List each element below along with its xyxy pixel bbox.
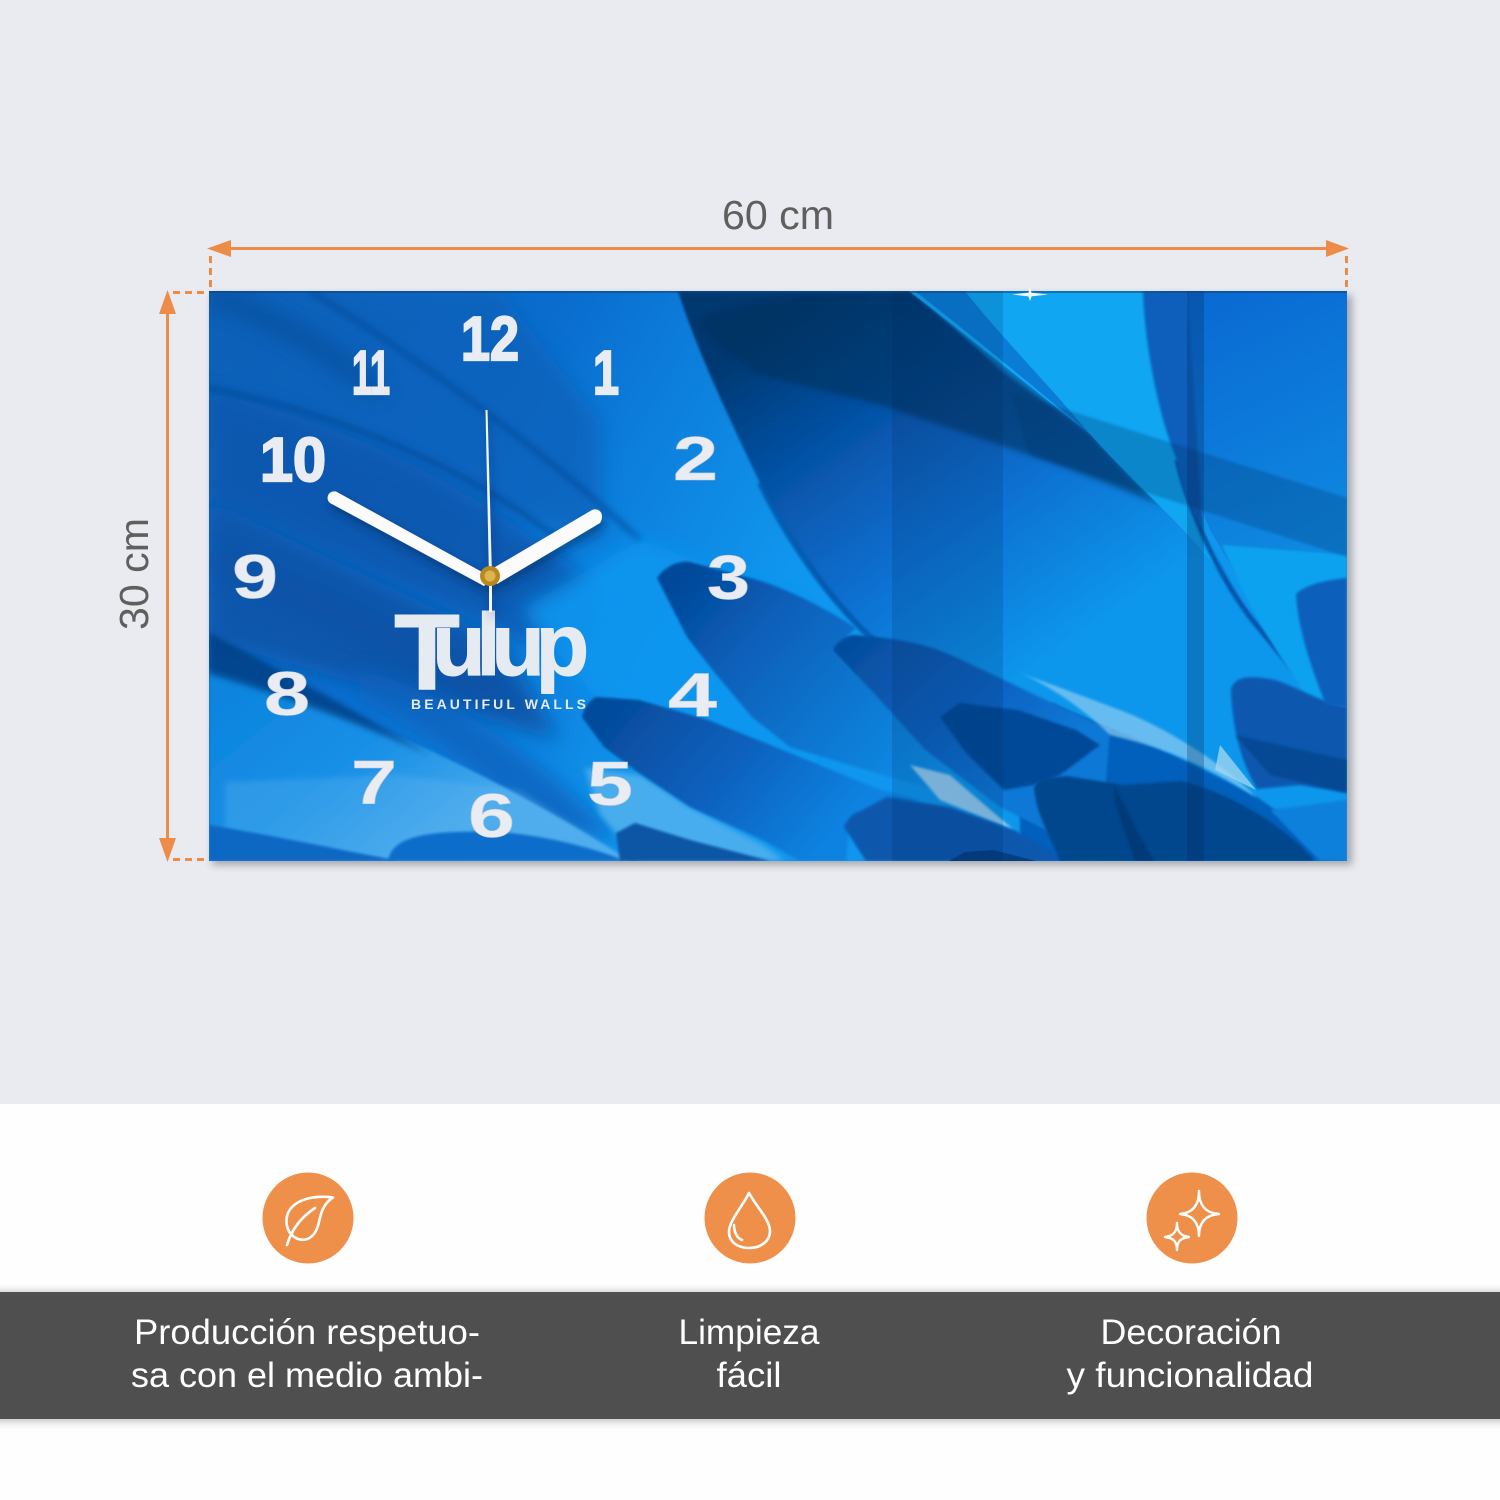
clock numerals: 12	[461, 305, 519, 374]
pale highlight above feather lobe	[910, 765, 1014, 830]
logo: Tulup Beautiful Walls: ulup	[432, 595, 586, 694]
diagonal reflected band	[1024, 404, 1347, 558]
dimension arrow: horizontal	[207, 240, 1349, 291]
clock numerals: 6	[468, 782, 515, 851]
dark petal mid bottom	[940, 703, 1100, 790]
logo: Tulup Beautiful Walls: T	[394, 591, 460, 712]
clock shadow	[212, 295, 1352, 865]
label: easy cleaning: fácil	[716, 1356, 782, 1395]
dark upper mass	[696, 291, 1162, 506]
upper right petal	[1160, 291, 1347, 566]
second lobe petal	[832, 634, 1110, 830]
vertical reflection bands	[892, 291, 1003, 861]
feature bar shadow	[0, 1291, 1500, 1422]
dimension label: height 30 cm: 30 cm	[111, 518, 157, 630]
small lobe at bottom edge	[949, 850, 1036, 861]
bright strip at lower right	[1270, 800, 1347, 861]
big dark petal	[677, 291, 1177, 662]
label: easy cleaning	[678, 1313, 820, 1395]
clock hands	[328, 410, 602, 612]
pale streak between lower petals	[585, 768, 785, 861]
diagonal darker band under logo	[369, 696, 614, 844]
clock numerals: 1	[593, 339, 619, 408]
clock numerals: 8	[264, 660, 310, 729]
clock numerals	[232, 305, 750, 851]
clock numerals: 10	[260, 426, 326, 495]
label: eco-friendly production	[131, 1313, 483, 1395]
label: decoration and functionality	[1066, 1313, 1314, 1395]
dimension arrow: vertical	[159, 290, 208, 862]
icon: leaf	[262, 1172, 354, 1264]
feature: decoration and functionality	[1066, 1172, 1314, 1395]
label: easy cleaning: Limpieza	[678, 1313, 820, 1352]
label: decoration and functionality: y funcionalidad	[1066, 1356, 1314, 1395]
clock numerals: 5	[587, 750, 633, 819]
logo: Tulup Beautiful Walls	[394, 591, 586, 712]
bottom petal lobes	[388, 832, 625, 861]
dark lower petals	[1034, 776, 1315, 861]
lobe at bottom left of centre	[616, 823, 770, 861]
bottom white panel	[0, 1104, 1500, 1500]
clock numerals: 11	[352, 339, 390, 408]
petal at right	[1020, 703, 1347, 861]
dark navy edge, lower left	[209, 632, 430, 755]
feature: eco-friendly production	[131, 1172, 483, 1395]
long petal, bottom centre	[582, 697, 920, 861]
upper left darker petal with soft streaks	[332, 295, 604, 540]
clock numerals: 9	[232, 543, 278, 612]
label: eco-friendly production: sa con el medio ambi-	[131, 1356, 483, 1395]
icon: sparkles	[1146, 1172, 1238, 1264]
clock face artwork: blue petals	[209, 291, 1347, 861]
glass top edge	[209, 291, 1347, 293]
clock numerals: 4	[668, 661, 718, 730]
clock numerals: 7	[351, 749, 397, 818]
clock numerals: 3	[707, 544, 750, 613]
clock numerals: 2	[673, 425, 718, 494]
dark feature bar	[0, 1292, 1500, 1419]
feature: easy cleaning	[678, 1172, 820, 1395]
top right bright panel	[909, 291, 1225, 580]
icon: water drop	[704, 1172, 796, 1264]
pale highlights	[1016, 672, 1257, 798]
label: eco-friendly production: Producción respetuo-	[134, 1313, 480, 1352]
right edge petals	[1231, 677, 1347, 793]
glint on top edge	[1012, 287, 1048, 301]
bright lower-left area	[209, 668, 630, 861]
blue stripe beside bright panel	[915, 291, 1089, 433]
dimension label: width 60 cm: 60 cm	[722, 192, 834, 238]
dark edge of big petal	[760, 483, 873, 640]
wall clock	[209, 287, 1347, 861]
bright centre	[517, 536, 680, 698]
bright cyan area at right	[1222, 545, 1347, 700]
upper lobe petal with overlap	[656, 560, 936, 782]
logo: Tulup Beautiful Walls: BEAUTIFUL WALLS	[411, 696, 586, 712]
page background	[0, 0, 1500, 1104]
feather lobe at bottom centre	[844, 797, 1066, 861]
pale reflection, lower left	[225, 775, 630, 861]
label: decoration and functionality: Decoración	[1100, 1313, 1282, 1352]
